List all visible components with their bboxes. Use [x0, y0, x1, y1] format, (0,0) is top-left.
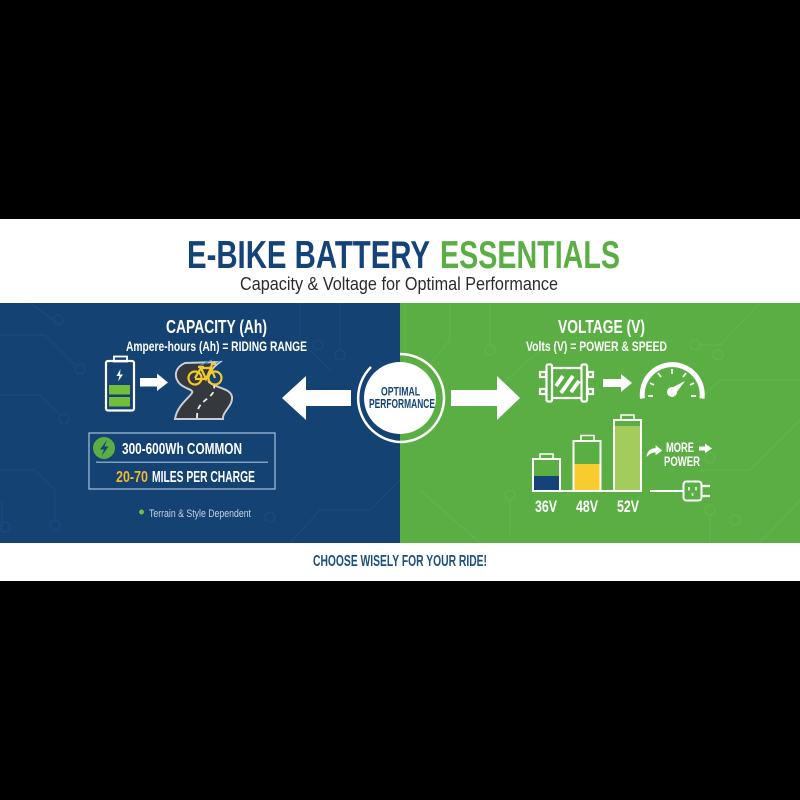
capacity subheading: Ampere-hours (Ah) = RIDING RANGE: [126, 338, 307, 354]
title: ESSENTIALS: [440, 234, 620, 277]
callout: more power: MORE: [666, 439, 694, 455]
panel: capacity: [0, 303, 400, 543]
voltage subheading: Volts (V) = POWER & SPEED: [526, 338, 667, 354]
icon: controller: [540, 364, 593, 402]
footer band: [0, 543, 800, 581]
stats box: [89, 433, 275, 489]
header band: [0, 219, 800, 303]
center badge: optimal performance: PERFORMANCE: [369, 397, 435, 411]
title: E-BIKE BATTERY: [187, 234, 430, 277]
center badge: optimal performance: [358, 354, 444, 442]
battery 36V: 36V: [535, 498, 557, 516]
icon: battery: [106, 356, 134, 410]
capacity heading: CAPACITY (Ah): [166, 316, 267, 337]
note: terrain: Terrain & Style Dependent: [149, 508, 251, 520]
icon: lightning circle: [93, 437, 115, 459]
stat: watt-hours: 300-600Wh COMMON: [122, 441, 242, 458]
panel: voltage: [400, 303, 800, 543]
center badge: optimal performance: OPTIMAL: [381, 384, 420, 398]
arrow: right: [451, 376, 520, 420]
subtitle: Capacity & Voltage for Optimal Performance: [240, 274, 558, 294]
battery 48V: 48V: [576, 498, 598, 516]
icon: plug: [650, 482, 710, 500]
stat: miles per charge: MILES PER CHARGE: [152, 469, 255, 486]
callout: more power: [647, 439, 712, 469]
arrow: left: [282, 376, 351, 420]
stat: miles per charge: 20-70: [116, 469, 148, 486]
battery 52V: 52V: [617, 498, 639, 516]
icon: speedometer: [642, 365, 702, 398]
chart: voltage batteries: [533, 415, 641, 516]
footer text: CHOOSE WISELY FOR YOUR RIDE!: [313, 553, 487, 570]
icon: winding road with bike: [175, 360, 232, 419]
arrow: controller to gauge: [603, 374, 632, 392]
voltage heading: VOLTAGE (V): [558, 316, 645, 337]
arrow: battery to road: [140, 374, 168, 391]
callout: more power: POWER: [664, 453, 700, 469]
stat: miles per charge: [116, 469, 255, 486]
